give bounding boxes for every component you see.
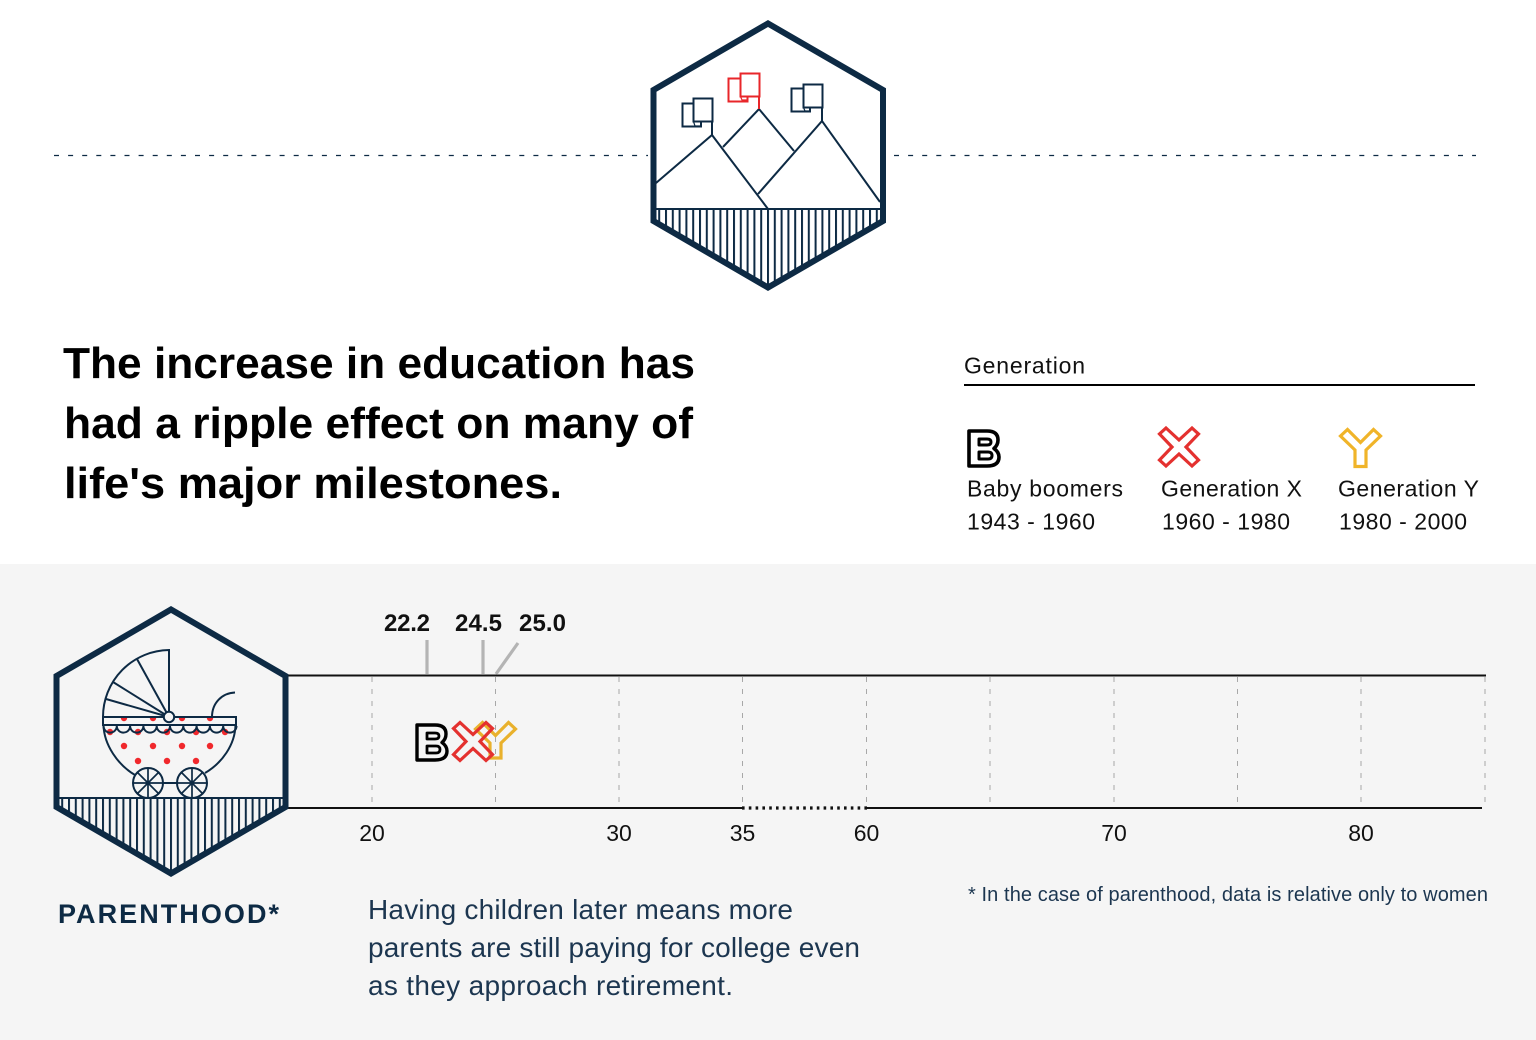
dotted horizon line bbox=[54, 154, 1476, 156]
axis labels: 60 bbox=[854, 820, 879, 846]
marker: X at 24.5 bbox=[454, 722, 492, 760]
pram polka dots bbox=[107, 715, 228, 764]
axis lines bbox=[286, 676, 1486, 808]
axis labels: 30 bbox=[606, 820, 632, 846]
legend labels bbox=[967, 476, 1479, 534]
legend: generation bbox=[964, 352, 1479, 534]
median age values bbox=[384, 610, 566, 637]
median age values: 24.5 bbox=[455, 610, 502, 637]
icon: B baby boomers bbox=[969, 431, 999, 466]
description text: parents are still paying for college even bbox=[368, 932, 860, 963]
footnote: * In the case of parenthood, data is relative only to women bbox=[968, 884, 1488, 906]
marker: B at 22.2 bbox=[417, 725, 447, 760]
legend labels: 1960 - 1980 bbox=[1162, 508, 1290, 534]
description text: as they approach retirement. bbox=[368, 970, 733, 1001]
axis labels: 35 bbox=[730, 820, 755, 846]
icon: education hexagon with mountains and flags bbox=[654, 24, 883, 288]
median age values: 25.0 bbox=[519, 610, 566, 637]
title bbox=[63, 339, 695, 508]
axis labels: 20 bbox=[359, 820, 385, 846]
legend heading: Generation bbox=[964, 352, 1085, 378]
legend labels: 1980 - 2000 bbox=[1339, 508, 1467, 534]
section label: PARENTHOOD* bbox=[58, 899, 279, 929]
bottom panel background bbox=[0, 564, 1536, 1040]
timeline chart: parenthood bbox=[286, 610, 1486, 846]
icon: Y generation Y bbox=[1340, 430, 1380, 466]
pram body bbox=[103, 650, 237, 798]
description text: Having children later means more bbox=[368, 894, 793, 925]
legend labels: Generation X bbox=[1161, 476, 1302, 502]
icon: X generation X bbox=[1160, 428, 1198, 466]
marker: Y at 25.0 bbox=[476, 722, 516, 758]
legend labels: Baby boomers bbox=[967, 476, 1123, 502]
legend labels: Generation Y bbox=[1338, 476, 1479, 502]
axis labels: 70 bbox=[1101, 820, 1127, 846]
axis labels bbox=[359, 820, 1374, 846]
title: The increase in education has bbox=[63, 339, 695, 388]
title: life's major milestones. bbox=[64, 459, 562, 508]
title: had a ripple effect on many of bbox=[64, 399, 693, 448]
icon: parenthood hexagon with pram bbox=[56, 610, 286, 874]
axis labels: 80 bbox=[1348, 820, 1374, 846]
vertical age gridlines bbox=[372, 677, 1485, 808]
value leader lines bbox=[427, 640, 518, 674]
legend labels: 1943 - 1960 bbox=[967, 508, 1095, 534]
description text bbox=[368, 894, 860, 1001]
median age values: 22.2 bbox=[384, 610, 430, 637]
